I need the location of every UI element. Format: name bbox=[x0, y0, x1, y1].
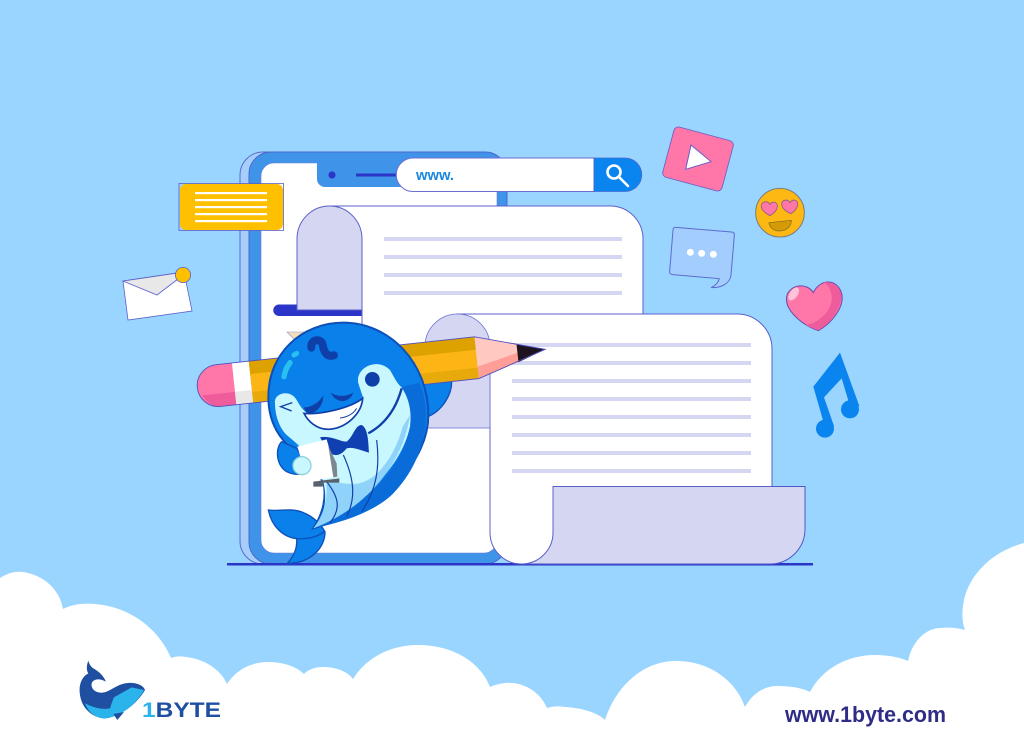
tablet screen bbox=[261, 163, 497, 553]
pencil outline bbox=[195, 329, 548, 409]
whale big eye bbox=[365, 372, 380, 387]
pencil cone bbox=[474, 332, 522, 379]
search bar bbox=[396, 158, 642, 192]
whale flipper bbox=[277, 442, 312, 474]
whale tail crease bbox=[297, 532, 324, 539]
url text: www. bbox=[415, 167, 454, 184]
document one roll bbox=[297, 206, 362, 310]
icon: magnifier bbox=[608, 166, 628, 186]
note lines bbox=[195, 192, 267, 222]
logo whale bbox=[80, 661, 145, 720]
whale body shade bbox=[313, 383, 426, 528]
document one outline bbox=[330, 206, 643, 333]
paper sheet bbox=[297, 439, 337, 482]
pencil eraser bbox=[195, 363, 237, 409]
whale neck line bbox=[368, 388, 402, 433]
paper side shade bbox=[328, 446, 337, 477]
whale belly grooves bbox=[327, 440, 378, 523]
document one text lines bbox=[384, 237, 622, 295]
whale bow tie bbox=[320, 425, 369, 455]
pencil ferrule bbox=[232, 361, 253, 405]
note card bbox=[180, 184, 283, 230]
tablet back shell bbox=[240, 152, 310, 564]
icon: heart-eyes emoji bbox=[756, 188, 804, 237]
right side icons bbox=[662, 126, 859, 438]
document two bbox=[425, 314, 805, 564]
clouds bbox=[0, 543, 1024, 740]
document two roll bbox=[425, 314, 490, 428]
folded lower sheet bbox=[521, 486, 805, 564]
pencil dark band bottom bbox=[252, 368, 479, 403]
eraser shade bbox=[202, 392, 237, 408]
tab line bbox=[356, 174, 401, 176]
icon: play card bbox=[662, 126, 734, 192]
paper shadow bbox=[313, 478, 339, 487]
document one sheet bbox=[330, 206, 643, 333]
whale hair curl bbox=[311, 340, 334, 356]
pencil body bbox=[249, 337, 479, 403]
whale hand bbox=[293, 457, 311, 475]
tablet frame bbox=[249, 152, 507, 564]
document two text lines bbox=[512, 343, 751, 473]
document one bbox=[297, 206, 643, 333]
whale tail bbox=[268, 510, 325, 563]
search field bbox=[396, 158, 594, 192]
icon: envelope bbox=[123, 267, 192, 320]
search button bbox=[594, 158, 642, 192]
tablet device bbox=[240, 152, 507, 564]
whale closed eye left bbox=[304, 395, 323, 413]
whale mascot bbox=[268, 323, 428, 563]
yellow note bbox=[179, 184, 284, 230]
tablet top tab bbox=[317, 162, 498, 187]
ferrule shade bbox=[235, 390, 253, 405]
logo wordmark: 1BYTE bbox=[142, 699, 221, 722]
whale closed eye right bbox=[331, 393, 353, 401]
cone shade bbox=[477, 352, 522, 379]
whale smile bbox=[304, 398, 363, 429]
pencil dark band top bbox=[249, 337, 476, 374]
tab camera dot bbox=[328, 171, 336, 179]
whale right fin bbox=[410, 360, 452, 417]
pencil tip bbox=[516, 341, 546, 362]
icon: heart bbox=[786, 282, 842, 331]
icon: music note bbox=[813, 353, 859, 438]
whale body bbox=[268, 323, 428, 528]
logo bbox=[80, 661, 221, 722]
pencil bbox=[195, 329, 548, 409]
icon: chat bubble bbox=[670, 227, 734, 288]
whale smile line bbox=[340, 408, 357, 418]
base line bbox=[227, 563, 813, 566]
whale lower belly bbox=[313, 415, 410, 528]
whale face and belly bbox=[275, 364, 411, 528]
whale wink bbox=[281, 403, 292, 411]
whale highlight bbox=[284, 353, 297, 377]
note frame bbox=[179, 184, 284, 230]
small triangle on tablet bbox=[287, 332, 312, 345]
dark bar on tablet bbox=[273, 304, 362, 316]
website url: www.1byte.com bbox=[784, 702, 946, 727]
document two sheet bbox=[457, 314, 772, 564]
